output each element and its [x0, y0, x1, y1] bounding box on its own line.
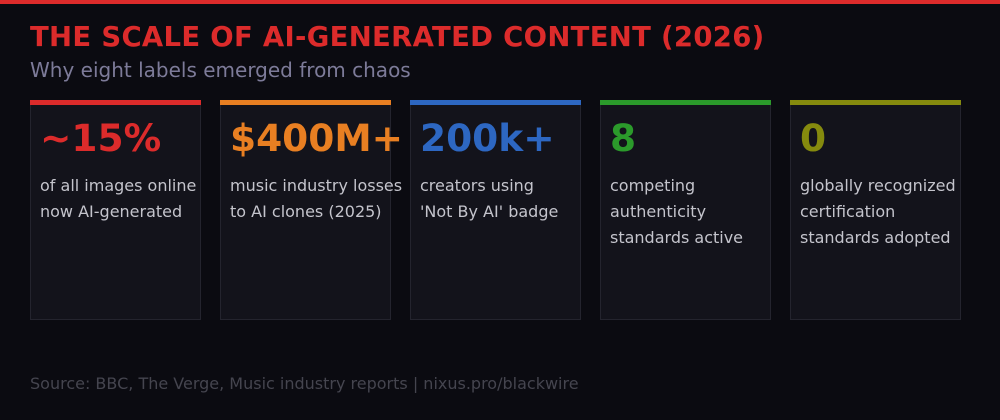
- panel: certification: certification: [800, 202, 895, 221]
- panel: images stat: ~15%: [40, 116, 161, 160]
- top accent bar: [0, 0, 1000, 4]
- panel: creators: 'Not By AI' badge: [420, 202, 558, 221]
- panel: creators: [410, 100, 581, 320]
- panel: music losses: music industry losses: [230, 176, 402, 195]
- panel: music losses: [220, 100, 391, 320]
- panel: images stat: of all images online: [40, 176, 196, 195]
- panel: competing standards: [600, 100, 771, 320]
- panel: certification: 0: [800, 116, 826, 160]
- panel: images stat: now AI-generated: [40, 202, 182, 221]
- panel: creators: creators using: [420, 176, 534, 195]
- panel: certification: standards adopted: [800, 228, 951, 247]
- subtitle: Why eight labels emerged from chaos: [30, 58, 411, 82]
- title: THE SCALE OF AI-GENERATED CONTENT (2026): [30, 21, 765, 53]
- panel: certification: globally recognized: [800, 176, 956, 195]
- panel: competing standards: competing: [610, 176, 695, 195]
- panel: music losses: $400M+: [230, 116, 403, 160]
- panel: images stat: [30, 100, 201, 320]
- panel: competing standards: authenticity: [610, 202, 706, 221]
- panel: music losses: to AI clones (2025): [230, 202, 382, 221]
- source footer: Source: BBC, The Verge, Music industry reports | nixus.pro/blackwire: [30, 374, 579, 393]
- panel: competing standards: 8: [610, 116, 636, 160]
- panel: competing standards: standards active: [610, 228, 743, 247]
- panel: creators: 200k+: [420, 116, 555, 160]
- panel: certification: [790, 100, 961, 320]
